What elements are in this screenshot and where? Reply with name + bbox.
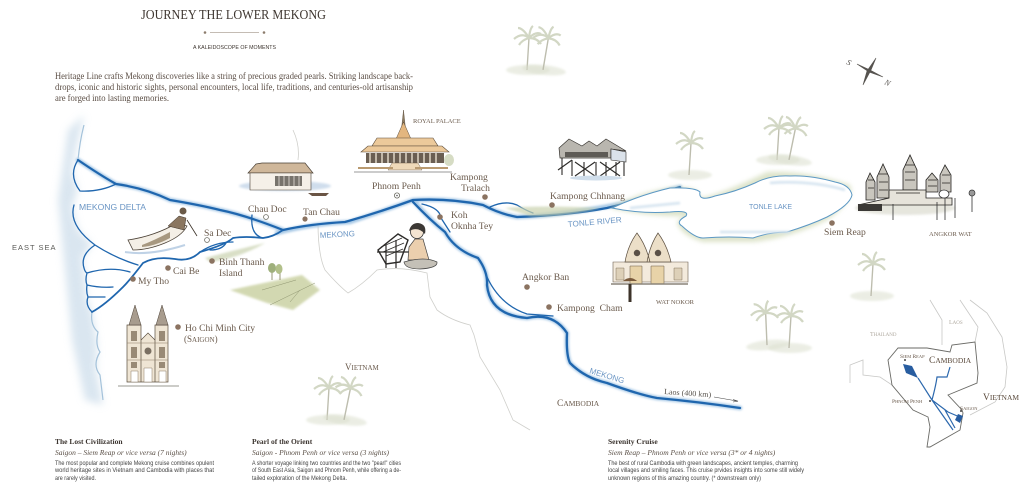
place labels: WAT NOKOR <box>656 299 695 306</box>
compass <box>845 58 892 88</box>
panel: Serenity Cruise: unknown regions of this amazing country. (* downstream only) <box>608 475 761 482</box>
panel: The Lost Civilization: Saigon – Siem Reap or vice versa (7 nights) <box>55 448 187 457</box>
locator map: PHNOM PENH <box>892 399 923 405</box>
river labels <box>79 203 792 385</box>
panel: The Lost Civilization: The most popular and complete Mekong cruise combines opulent <box>55 460 214 467</box>
locator map: THAILAND <box>870 332 897 338</box>
icon: Angkor Wat <box>855 155 975 220</box>
panel: Serenity Cruise: Siem Reap – Phnom Penh or vice versa (3* or 4 nights) <box>608 448 776 457</box>
compass: N <box>882 77 892 88</box>
place labels: Chau Doc <box>248 204 287 215</box>
locator map: SIEM REAP <box>900 354 925 360</box>
panel: Pearl of the Orient: tailed exploration of the Mekong Delta. <box>252 475 347 482</box>
place labels: EAST SEA <box>12 243 57 252</box>
panel: The Lost Civilization: are rarely visited. <box>55 475 96 482</box>
panel: The Lost Civilization: The Lost Civilization <box>55 437 123 446</box>
place labels: Laos (400 km) <box>664 387 712 399</box>
icon: royal palace <box>354 110 454 172</box>
place labels: ROYAL PALACE <box>413 118 461 125</box>
locator map: SAIGON <box>960 406 978 412</box>
green bank <box>505 206 600 216</box>
place labels: Angkor Ban <box>522 272 569 283</box>
place labels: Oknha Tey <box>451 221 493 232</box>
locator map: LAOS <box>949 320 963 326</box>
Mekong parallel channels <box>422 204 553 316</box>
coastline wash <box>58 115 103 405</box>
icon: fishing stilt houses <box>558 139 626 180</box>
panel: Pearl of the Orient: Pearl of the Orient <box>252 437 313 446</box>
icon: floating boat with rower <box>125 208 197 253</box>
subtitle: A KALEIDOSCOPE OF MOMENTS <box>193 45 276 51</box>
place labels: Sa Dec <box>204 228 231 239</box>
soft river glow <box>78 160 740 408</box>
intro paragraph <box>55 71 413 104</box>
place labels: VIETNAM <box>345 362 379 372</box>
upper Mekong <box>283 187 680 230</box>
panel: Serenity Cruise: The best of rural Cambodia with green landscapes, ancient temples, charming <box>608 460 798 467</box>
locator map: CAMBODIA <box>929 356 972 366</box>
intro paragraph: are forged into lasting memories. <box>55 93 169 104</box>
country borders <box>850 300 1007 415</box>
panel: Pearl of the Orient: Saigon - Phnom Penh or vice versa (3 nights) <box>252 448 390 457</box>
river labels: TONLE RIVER <box>567 215 622 229</box>
panel: Serenity Cruise: local villages and smiling faces. This cruise prvides insights into some still widely <box>608 467 805 474</box>
panel: The Lost Civilization: world heritage sites in Vietnam and Cambodia with places that <box>54 467 214 474</box>
place labels: Tralach <box>461 183 490 194</box>
icon: church <box>118 305 179 386</box>
place labels: My Tho <box>138 276 169 287</box>
lower Mekong <box>413 202 740 408</box>
place labels: Phnom Penh <box>372 181 421 192</box>
place labels: Siem Reap <box>824 227 866 238</box>
delta main channel <box>92 230 283 312</box>
icon: weaver at loom <box>377 223 437 269</box>
river labels: MEKONG <box>588 366 625 385</box>
icon: stilt house on water <box>239 163 331 196</box>
river labels: TONLE LAKE <box>749 204 792 211</box>
place labels: Kampong <box>450 172 488 183</box>
place labels: Koh <box>451 210 468 221</box>
place labels: CAMBODIA <box>557 399 600 409</box>
rivers <box>73 160 740 408</box>
panel: The Lost Civilization <box>54 437 214 482</box>
place labels: ANGKOR WAT <box>929 231 972 238</box>
coast edge <box>78 125 103 400</box>
place labels: Kampong Cham <box>557 303 623 314</box>
place labels: (SAIGON) <box>184 334 218 344</box>
panel: Pearl of the Orient <box>252 437 401 482</box>
place labels: Kampong Chhnang <box>550 191 625 202</box>
place labels <box>12 118 972 409</box>
intro paragraph: Heritage Line crafts Mekong discoveries like a string of precious graded pearls. Striking landscape back- <box>55 71 413 82</box>
arrow: to Laos <box>714 397 738 402</box>
panel: Pearl of the Orient: of South East Asia, Saigon and Phnom Penh, while offering a de- <box>252 467 401 474</box>
panel: Serenity Cruise <box>608 437 805 482</box>
title: JOURNEY THE LOWER MEKONG <box>141 8 326 23</box>
icon: Wat Nokor temple <box>611 233 688 302</box>
border lines <box>293 130 530 430</box>
delta north branch <box>78 160 283 230</box>
river labels: MEKONG <box>320 229 355 240</box>
place labels: Ho Chi Minh City <box>185 323 255 334</box>
compass: S <box>845 58 853 68</box>
locator map <box>850 300 1019 447</box>
locator map: VIETNAM <box>983 393 1019 403</box>
place labels: Cai Be <box>173 266 199 277</box>
place labels: Tan Chau <box>303 207 340 218</box>
intro paragraph: drops, iconic and historic sights, personal encounters, local life, traditions, and centuries-old artisanship <box>55 82 413 93</box>
icon: rice field <box>230 263 320 310</box>
panel: Pearl of the Orient: A shorter voyage linking two countries and the two "pearl" cities <box>252 460 401 467</box>
panel: Serenity Cruise: Serenity Cruise <box>608 437 658 446</box>
place labels: Island <box>219 268 243 279</box>
delta side channels <box>73 160 263 312</box>
title ornament <box>204 32 265 34</box>
Kampong Chhnang loop <box>490 203 533 213</box>
river labels: MEKONG DELTA <box>79 203 147 212</box>
place labels: Binh Thanh <box>219 257 265 268</box>
Tonle lake <box>610 172 852 242</box>
palm trees <box>306 24 894 428</box>
